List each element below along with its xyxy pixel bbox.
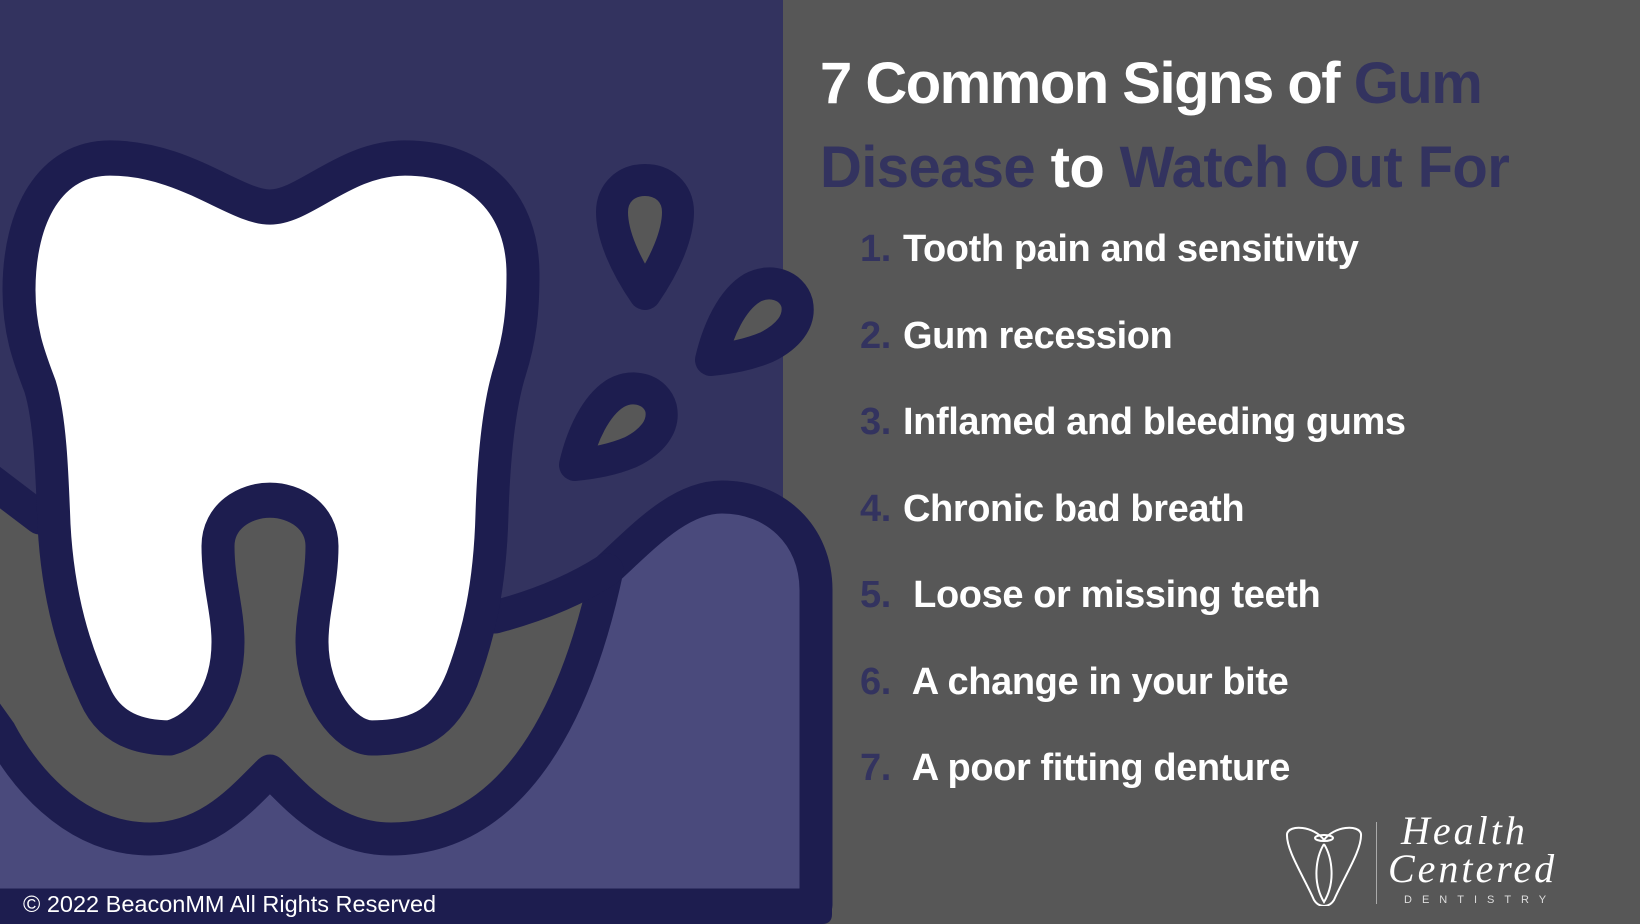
illustration: tooth panel xyxy=(0,0,832,924)
list of signs: 6. xyxy=(860,661,891,703)
list of signs: 4. xyxy=(860,488,891,530)
logo text: Centered xyxy=(1388,846,1557,891)
list of signs xyxy=(860,228,1406,789)
bottom band xyxy=(0,889,832,924)
icon: tooth xyxy=(19,158,523,738)
gum top lines xyxy=(0,480,607,617)
list of signs: 1. xyxy=(860,228,891,270)
list of signs: Loose or missing teeth xyxy=(913,574,1320,616)
title: 7 Common Signs of Gum xyxy=(820,51,1481,116)
divider xyxy=(1376,822,1377,904)
panel background xyxy=(0,0,783,924)
list of signs: 3. xyxy=(860,401,891,443)
list of signs: 2. xyxy=(860,315,891,357)
logo xyxy=(1286,808,1557,906)
list of signs: Gum recession xyxy=(903,315,1172,357)
list of signs: Chronic bad breath xyxy=(903,488,1244,530)
gum gray area xyxy=(0,470,607,839)
list of signs: 7. xyxy=(860,747,891,789)
title: Disease to Watch Out For xyxy=(820,135,1509,200)
icon: drops xyxy=(575,180,798,465)
logo: DENTISTRY xyxy=(1404,894,1556,906)
list of signs: 5. xyxy=(860,574,891,616)
list of signs: A poor fitting denture xyxy=(912,747,1290,789)
icon: logo tooth xyxy=(1286,826,1362,906)
list of signs: Tooth pain and sensitivity xyxy=(903,228,1358,270)
logo text: Health xyxy=(1401,808,1528,853)
list of signs: A change in your bite xyxy=(912,661,1288,703)
lavender block xyxy=(0,497,816,905)
list of signs: Inflamed and bleeding gums xyxy=(903,401,1406,443)
title xyxy=(820,51,1509,200)
copyright: © 2022 BeaconMM All Rights Reserved xyxy=(23,891,436,917)
logo text xyxy=(1388,808,1557,891)
